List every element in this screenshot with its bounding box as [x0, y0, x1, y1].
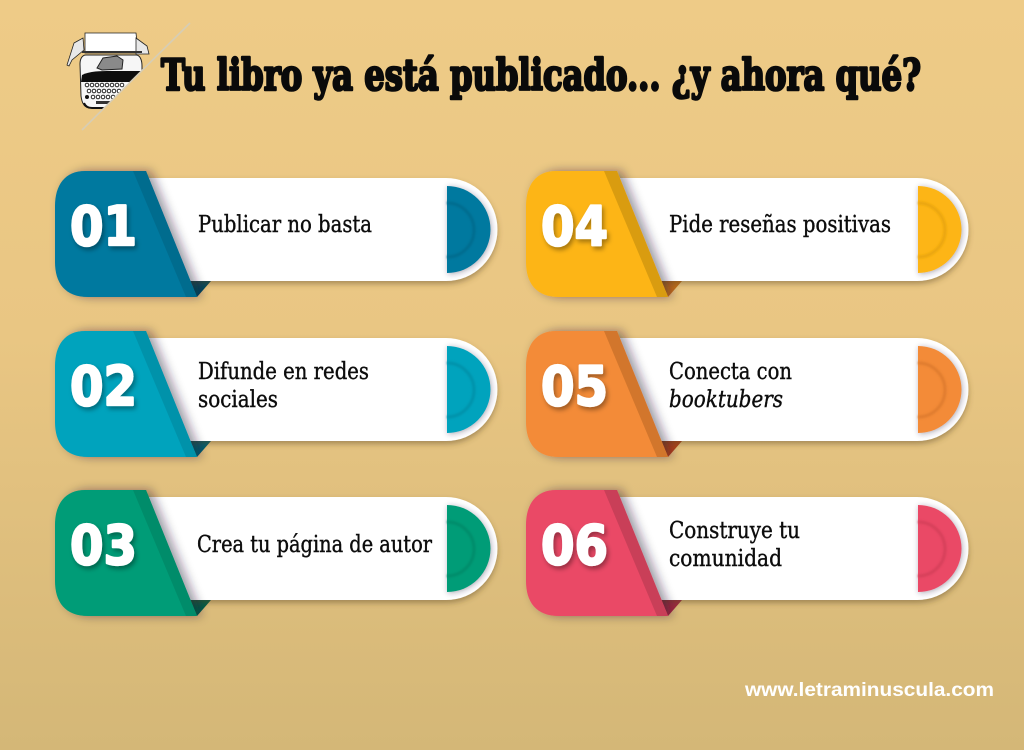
label 06	[669, 518, 800, 572]
label 04: Pide reseñas positivas	[669, 212, 891, 238]
number 02: 02	[70, 355, 137, 418]
label 02	[198, 359, 369, 413]
icon: typewriter	[67, 23, 190, 130]
panel: 01 Publicar no basta	[55, 171, 498, 297]
label 05: booktubers	[669, 387, 783, 413]
panel: 04 Pide reseñas positivas	[526, 171, 969, 297]
panel: 03 Crea tu página de autor	[55, 490, 498, 616]
number 06: 06	[541, 514, 608, 577]
label 01: Publicar no basta	[198, 212, 372, 238]
label 02: sociales	[198, 387, 278, 413]
label 05	[669, 359, 792, 413]
number 04: 04	[541, 195, 608, 258]
panel: 05 Conecta con booktubers	[526, 331, 968, 457]
label 06: comunidad	[669, 546, 782, 572]
number 03: 03	[70, 514, 137, 577]
label 05: Conecta con	[669, 359, 792, 385]
label 02: Difunde en redes	[198, 359, 369, 385]
panel: 06 Construye tu comunidad	[526, 490, 969, 616]
label 06: Construye tu	[669, 518, 800, 544]
website url: www.letraminuscula.com	[744, 680, 994, 701]
number 05: 05	[541, 355, 608, 418]
number 01: 01	[70, 195, 137, 258]
panel: 02 Difunde en redes sociales	[55, 331, 497, 457]
label 03: Crea tu página de autor	[197, 532, 432, 558]
